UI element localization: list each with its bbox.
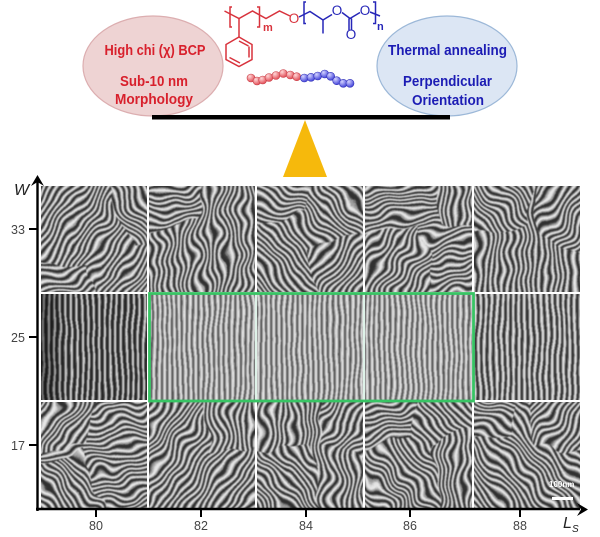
axis: Ls horizontal: L <box>563 515 572 532</box>
axis: Ls horizontal: 82 <box>194 519 208 533</box>
axis: Ls horizontal: 84 <box>299 519 313 533</box>
ellipse: thermal annealing: Orientation <box>412 93 484 109</box>
icon: red and blue bead chain <box>247 70 354 87</box>
axis: Ls horizontal: 88 <box>513 519 527 533</box>
SEM panel: W33 Ls86 <box>365 186 472 292</box>
label: blue oxygen atoms and subscript: O <box>360 3 370 18</box>
SEM panel: W33 Ls88 <box>474 186 580 292</box>
label: blue oxygen atoms and subscript: n <box>377 21 384 33</box>
label: blue oxygen atoms and subscript <box>332 3 384 42</box>
SEM panel: W17 Ls84 <box>257 402 363 508</box>
axis: W vertical <box>11 175 44 511</box>
scale bar: 100 nm <box>549 480 574 500</box>
highlight: faint dividers inside green window <box>256 294 364 400</box>
scale bar: 100 nm: 100nm <box>549 480 574 489</box>
fulcrum triangle <box>283 120 327 177</box>
axis: W vertical: 25 <box>11 331 25 345</box>
label: blue oxygen atoms and subscript: O <box>346 27 356 42</box>
label: red oxygen atom: O <box>289 11 299 26</box>
SEM panel: W17 Ls82 <box>149 402 255 508</box>
SEM panel: W25 Ls80 <box>41 294 147 400</box>
SEM panel: W17 Ls86 <box>365 402 472 508</box>
SEM panel: W25 Ls84 <box>257 294 363 400</box>
chemical structure: red polystyrene block <box>224 7 290 66</box>
axis: W vertical: W <box>14 182 31 199</box>
SEM panel: W17 Ls80 <box>41 402 147 508</box>
SEM panel: W33 Ls84 <box>257 186 363 292</box>
label: m subscript: m <box>263 22 273 34</box>
chart: SEM morphology grid <box>41 186 580 508</box>
axis: W vertical: 33 <box>11 223 25 237</box>
ellipse: thermal annealing <box>377 16 517 116</box>
ellipse: thermal annealing: Thermal annealing <box>388 43 507 59</box>
SEM panel: W33 Ls82 <box>149 186 255 292</box>
ellipse: high chi block copolymer: High chi (χ) BCP <box>104 43 206 59</box>
balance beam <box>152 115 450 120</box>
ellipse: high chi block copolymer: Sub-10 nm <box>120 74 188 90</box>
label: blue oxygen atoms and subscript: O <box>332 3 342 18</box>
ellipse: high chi block copolymer: Morphology <box>115 92 193 108</box>
SEM panel: W17 Ls88 <box>474 402 580 508</box>
axis: Ls horizontal <box>36 503 588 535</box>
SEM panel: W25 Ls86 <box>365 294 472 400</box>
ellipse: high chi block copolymer <box>83 16 223 116</box>
SEM panel: W25 Ls82 <box>150 294 255 400</box>
SEM panel: W33 Ls80 <box>41 186 147 292</box>
axis: Ls horizontal: 86 <box>403 519 417 533</box>
axis: W vertical: 17 <box>11 439 25 453</box>
ellipse: thermal annealing: Perpendicular <box>403 74 492 90</box>
chemical structure: blue polycarbonate block <box>299 2 380 34</box>
axis: Ls horizontal: S <box>572 524 579 535</box>
highlight: green optimal window <box>150 294 474 401</box>
axis: Ls horizontal: 80 <box>89 519 103 533</box>
SEM panel: W25 Ls88 <box>474 294 580 400</box>
panel: balance scale header <box>83 2 517 177</box>
